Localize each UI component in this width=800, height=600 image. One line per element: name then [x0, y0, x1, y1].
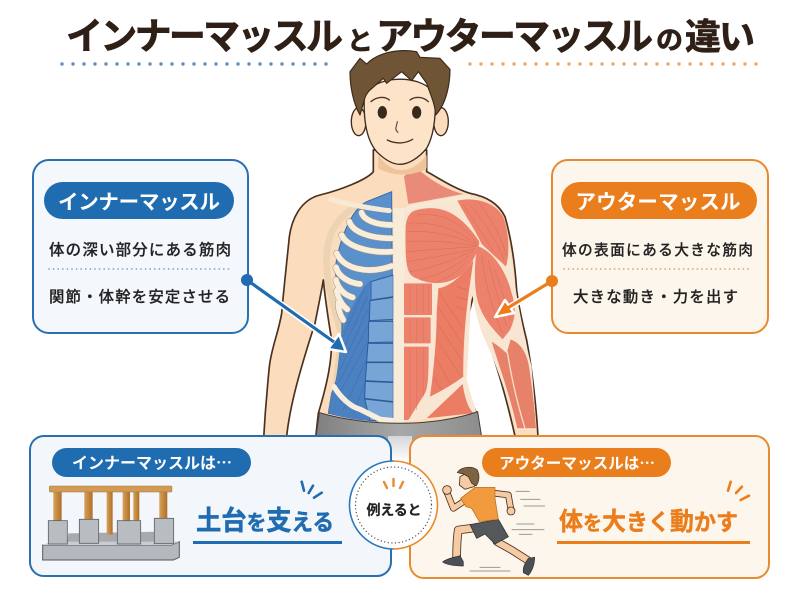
gap fade between bottom panels — [388, 436, 412, 462]
hair — [350, 51, 450, 115]
ears — [351, 108, 448, 136]
title — [66, 16, 755, 57]
sparks — [384, 479, 403, 488]
underline — [557, 541, 750, 544]
pill heading: インナーマッスル — [58, 191, 220, 214]
description 2: 関節・体幹を安定させる — [49, 288, 230, 306]
title: と — [347, 26, 373, 56]
shorts — [470, 519, 508, 544]
pill label: インナーマッスルは… — [72, 450, 232, 474]
neck muscle — [404, 167, 463, 204]
oblique — [328, 280, 370, 421]
speed lines — [470, 491, 545, 571]
pill heading: アウターマッスル — [576, 191, 740, 214]
badge text: 例えると — [366, 502, 422, 518]
badge: for example — [350, 461, 438, 549]
shoes — [443, 556, 463, 566]
biceps — [475, 246, 515, 339]
icon: runner — [443, 467, 545, 575]
title: インナーマッスル — [66, 16, 343, 57]
panel: foundation analogy — [30, 436, 391, 576]
pill label — [482, 448, 671, 477]
analogy text: 体を大きく動かす — [559, 508, 738, 536]
panel: outer muscle definition — [552, 160, 768, 333]
icon: foundation — [43, 486, 179, 560]
head — [459, 472, 478, 489]
inner muscles: blue side — [328, 192, 393, 422]
rectus abdominis — [404, 283, 432, 420]
pill label — [52, 448, 251, 477]
legs — [457, 528, 528, 561]
pants — [315, 412, 483, 443]
facial features — [371, 97, 428, 143]
panel: runner analogy — [410, 436, 769, 578]
panel: inner muscle definition — [33, 160, 248, 333]
title: 違い — [685, 16, 755, 57]
neck shadow — [378, 155, 427, 175]
arrow: outer muscle — [495, 275, 558, 317]
sparks — [728, 482, 749, 500]
description 1: 体の深い部分にある筋肉 — [49, 241, 231, 259]
pectoral — [406, 208, 479, 283]
underline — [193, 541, 342, 544]
trunk band beside ribs — [326, 207, 355, 393]
head — [350, 51, 450, 175]
shirt — [461, 487, 498, 522]
anatomical figure — [263, 51, 538, 443]
pill heading — [44, 182, 234, 219]
description 1: 体の表面にある大きな筋肉 — [562, 241, 753, 259]
lower hip muscle — [427, 384, 473, 418]
analogy text: 土台を支える — [196, 506, 334, 536]
hip bone — [334, 387, 393, 421]
abdominal blocks: blue — [365, 275, 393, 421]
sparks — [302, 482, 322, 498]
right side tendon base — [403, 197, 537, 430]
external oblique — [430, 260, 473, 397]
arrow: inner muscle — [241, 274, 346, 352]
clavicles — [331, 197, 468, 211]
sternum — [393, 208, 404, 424]
arms — [447, 492, 511, 510]
pill heading — [561, 182, 757, 219]
deltoid — [457, 199, 508, 267]
pill label: アウターマッスルは… — [499, 452, 655, 474]
description 2: 大きな動き・力を出す — [573, 288, 738, 306]
title: アウターマッスル — [376, 16, 653, 57]
ribcage — [336, 213, 392, 320]
body silhouette — [263, 150, 538, 443]
face — [364, 79, 436, 164]
forearm — [492, 339, 536, 428]
title: の — [656, 25, 683, 55]
